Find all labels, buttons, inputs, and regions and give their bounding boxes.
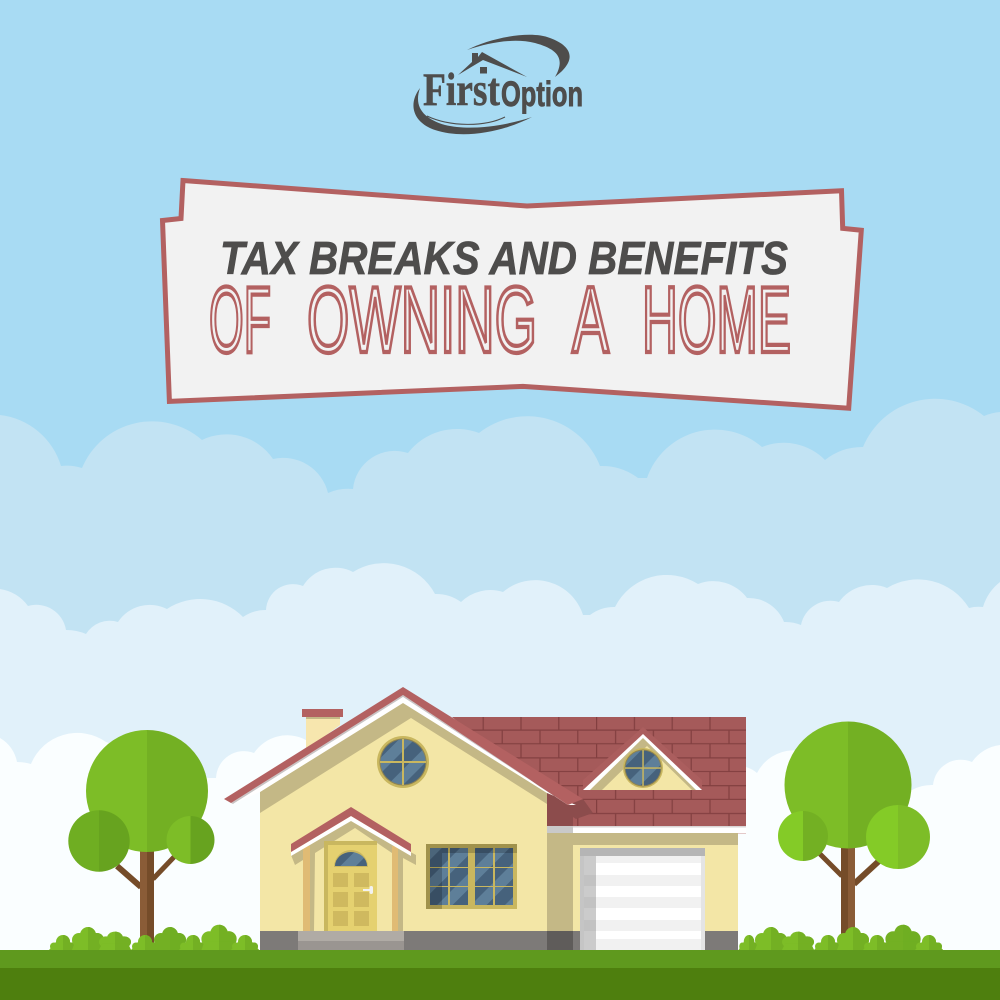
main roof (224, 687, 583, 805)
trunk and branches (117, 840, 174, 950)
main wall (260, 702, 547, 950)
heading: tax breaks and benefits: TAX BREAKS AND BENEFITS (220, 232, 788, 284)
back cloud layer (0, 399, 1000, 800)
door arch window (334, 850, 368, 867)
ground (0, 950, 1000, 1000)
logo roof (458, 52, 527, 77)
canopy (778, 722, 930, 869)
left tree (68, 730, 214, 950)
logo lower swoosh (413, 88, 532, 134)
porch roof (291, 807, 411, 852)
right tree (778, 722, 930, 950)
banner shape (162, 180, 861, 408)
logo upper swoosh (467, 35, 570, 77)
roof shadow (547, 790, 593, 826)
logo text Option: Option (501, 75, 583, 114)
heading: of owning a home: HOME (642, 267, 791, 372)
right column (392, 846, 398, 931)
main roof white trim (233, 697, 576, 805)
heading: of owning a home (209, 267, 791, 372)
dormer (583, 727, 702, 790)
garage door (580, 848, 705, 950)
logo thin arc (427, 116, 505, 124)
foundation (260, 931, 738, 950)
canopy (68, 730, 214, 872)
gutter (547, 826, 746, 834)
title banner (162, 180, 861, 408)
middle cloud layer (0, 563, 1000, 1000)
main window (426, 844, 517, 909)
left column (303, 846, 310, 931)
logo: First Option (413, 35, 583, 134)
house (224, 687, 746, 950)
garage wall (547, 833, 738, 950)
porch white trim (291, 816, 411, 856)
right bushes (738, 925, 943, 950)
front cloud layer (0, 733, 1000, 1000)
back roof with bricks (452, 717, 746, 826)
door (324, 841, 377, 931)
logo text First: First (423, 64, 500, 116)
door panels (333, 873, 369, 926)
trunk and branches (820, 840, 879, 950)
round attic window (377, 736, 429, 788)
heading: of owning a home: OWNING (307, 267, 537, 372)
gable shadow (260, 702, 547, 813)
heading: of owning a home: OF (209, 267, 271, 372)
left bushes (49, 925, 259, 950)
chimney (302, 709, 343, 750)
porch (291, 807, 416, 931)
dormer window (623, 748, 663, 788)
main roof grey edge (231, 695, 568, 805)
porch shadow (291, 820, 416, 931)
heading: of owning a home: A (572, 267, 609, 372)
logo window (480, 67, 487, 74)
garage wall shadow (547, 833, 738, 932)
door handle (363, 886, 373, 894)
